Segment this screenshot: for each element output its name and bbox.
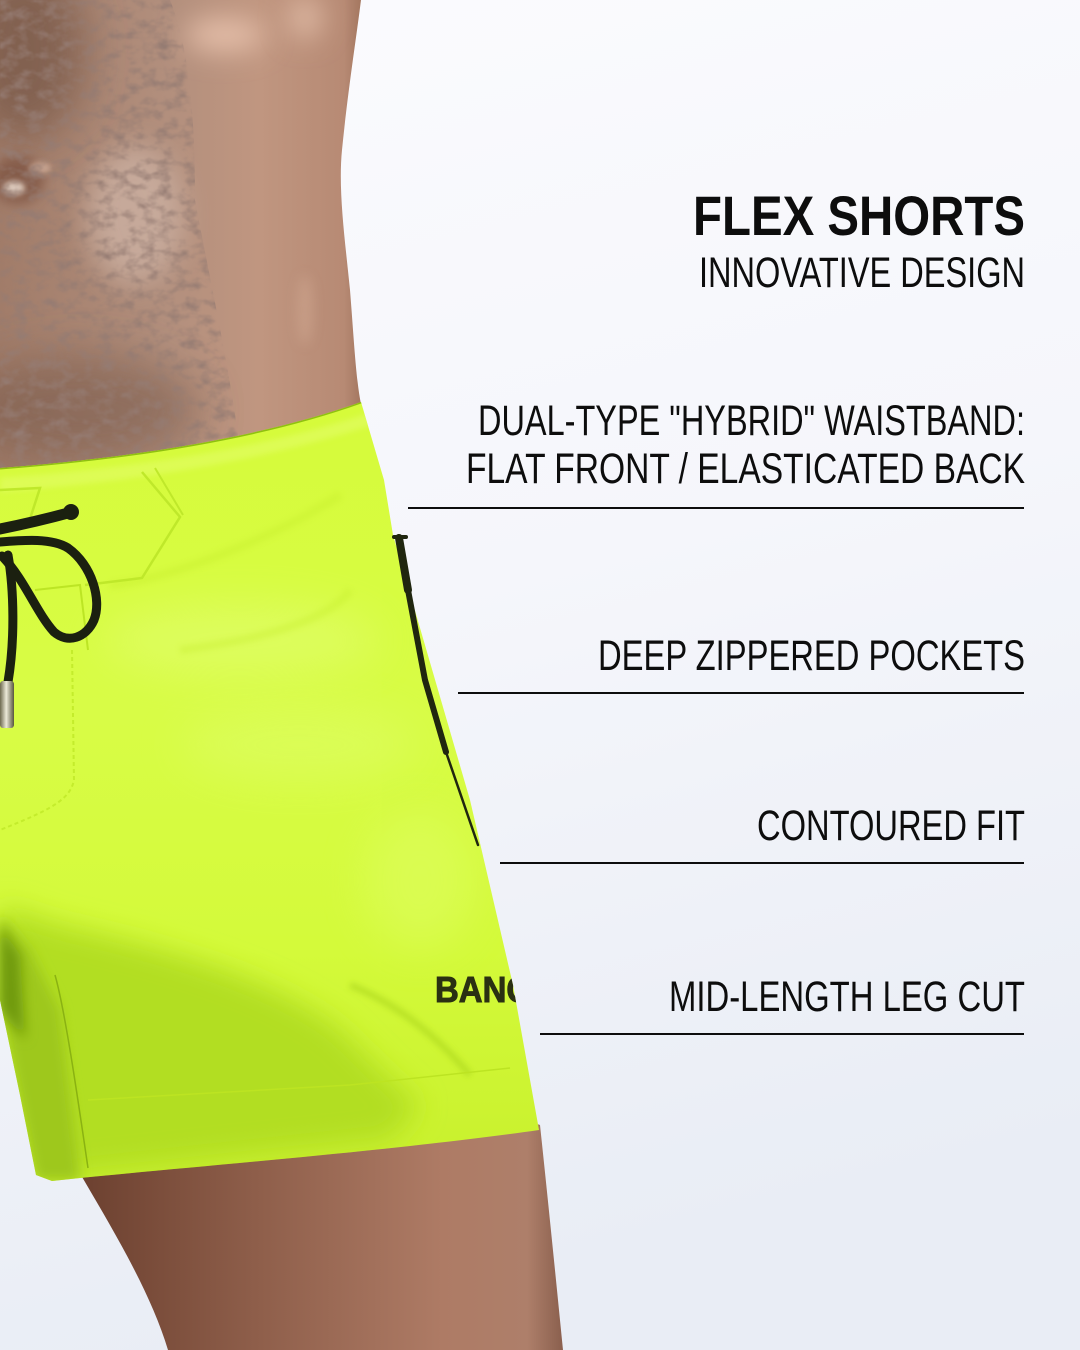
model: torso: [0, 0, 361, 468]
drawstring: [0, 504, 97, 682]
title: [693, 184, 1025, 297]
waistband tab and seams: [85, 472, 180, 585]
title: FLEX SHORTS: [693, 184, 1025, 247]
brand logo on shorts: BANG: [435, 969, 532, 1010]
model: neon shorts: [0, 402, 539, 1181]
drawstring metal tip: [0, 681, 14, 728]
model: leg: [78, 1110, 563, 1350]
zippered pocket: [394, 537, 478, 845]
feature: waistband: [408, 397, 1025, 509]
